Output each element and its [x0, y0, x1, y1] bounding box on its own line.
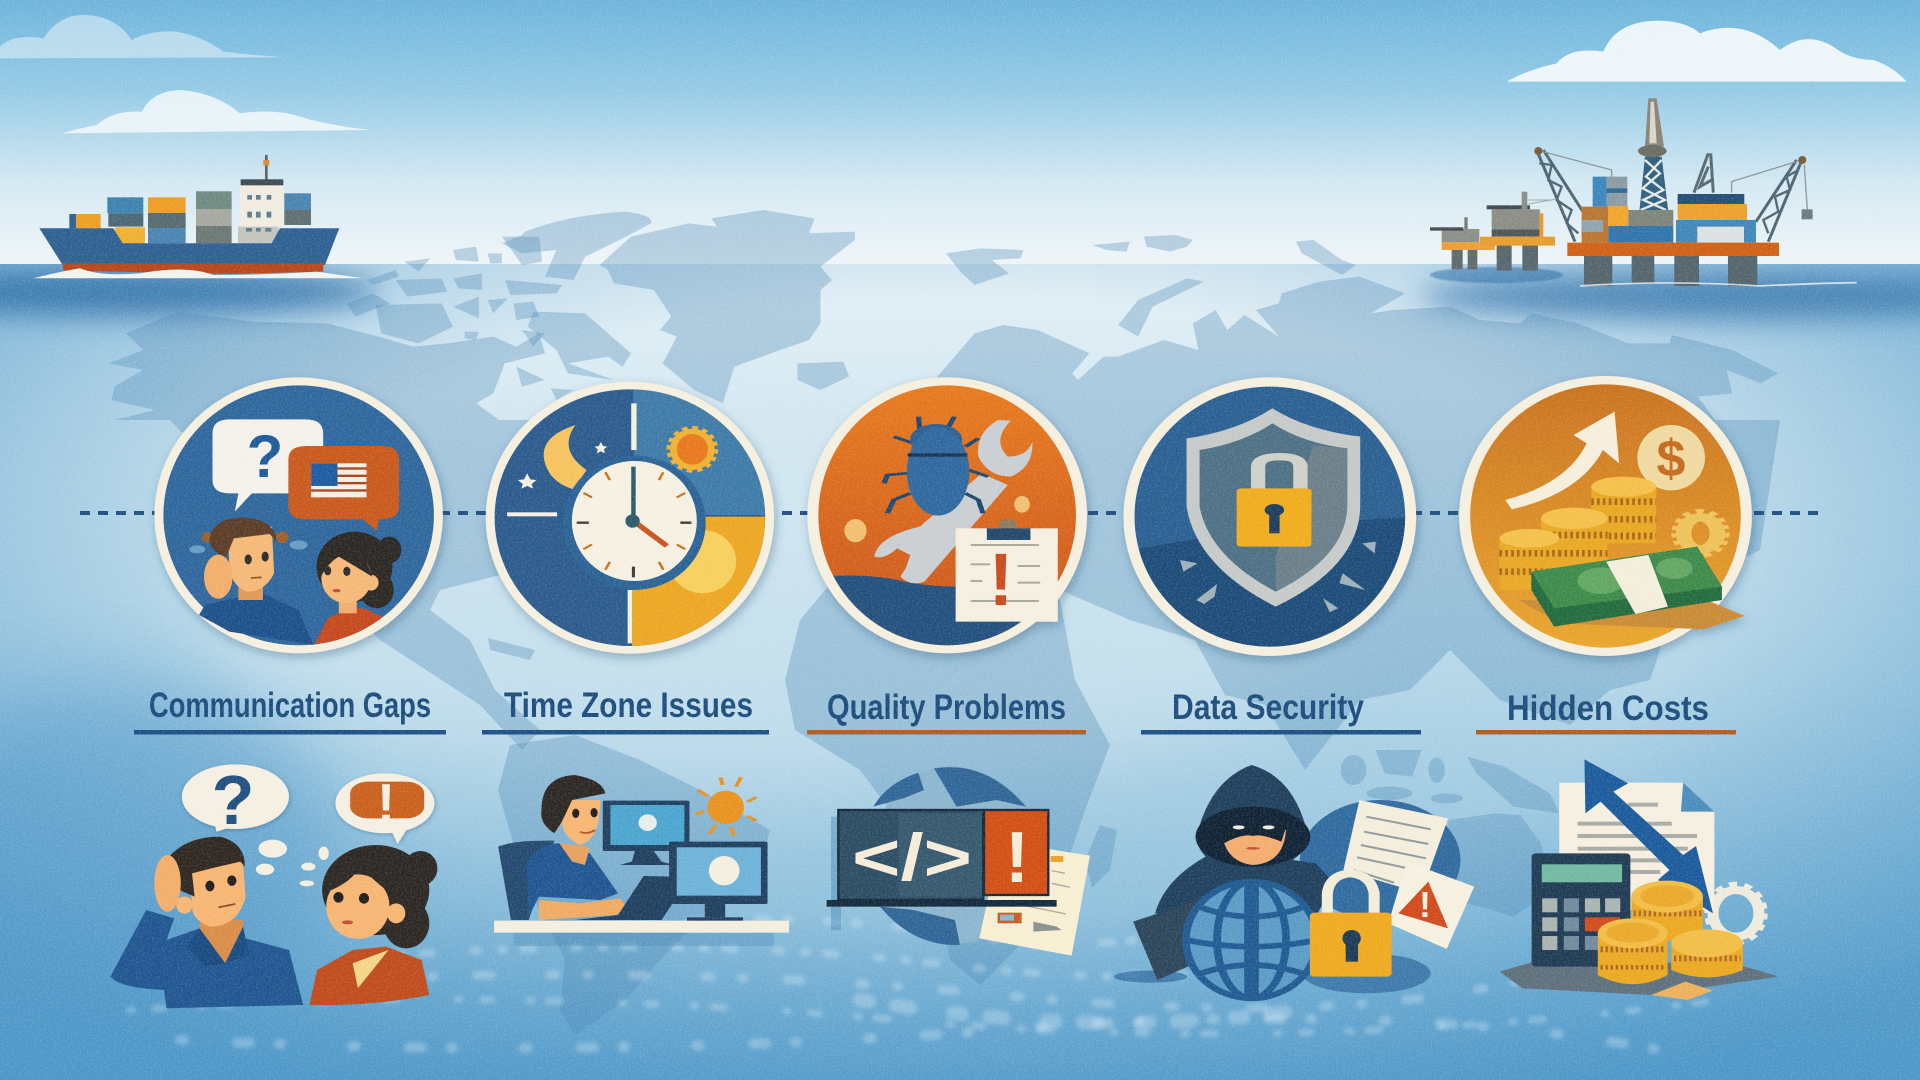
cloud: top left	[0, 15, 287, 58]
envelope under cash	[1518, 600, 1745, 629]
sun	[695, 777, 756, 836]
question speech bubble	[182, 764, 289, 832]
label: Quality Problems: Quality Problems	[827, 688, 1066, 727]
label: Time Zone Issues	[482, 686, 769, 734]
cloud: above ship	[62, 90, 370, 133]
small rig near	[1480, 192, 1555, 271]
question bubble	[212, 419, 323, 512]
illustration: remote worker at desk	[494, 775, 789, 946]
cash bundle	[1531, 547, 1722, 627]
map: Indonesia and Australia	[1341, 750, 1559, 917]
front monitor	[669, 842, 768, 922]
stars	[518, 442, 607, 489]
circle frame	[154, 377, 443, 653]
label: Data Security: Data Security	[1172, 688, 1364, 727]
main rig deck	[1567, 243, 1779, 256]
sweat drops	[189, 540, 308, 553]
main rig right crane	[1732, 156, 1813, 242]
paper	[979, 849, 1090, 956]
man with question	[199, 517, 313, 645]
rising arrow	[1505, 412, 1619, 509]
desk shadow	[513, 933, 774, 946]
desk	[494, 921, 789, 933]
illustration: calculator, coins and falling arrow	[1500, 759, 1779, 1000]
label: Data Security	[1141, 688, 1421, 734]
receipt	[1651, 982, 1713, 1000]
exclamation mark: !	[1005, 818, 1029, 898]
dollar sign: $	[1657, 430, 1686, 488]
orbs	[1014, 496, 1030, 513]
world map	[109, 210, 1780, 1035]
back globe disc	[1300, 800, 1460, 920]
map: Caribbean islands	[488, 638, 535, 660]
exclamation on clipboard: !	[989, 538, 1013, 621]
ground shadow	[1114, 953, 1431, 993]
dark card	[1133, 900, 1210, 980]
main rig legs	[1584, 255, 1757, 286]
label: Communication Gaps	[134, 686, 446, 734]
worker	[526, 775, 627, 920]
label: Time Zone Issues: Time Zone Issues	[504, 686, 753, 725]
question mark: ?	[247, 423, 283, 490]
padlock	[1237, 457, 1311, 547]
circle artwork	[163, 385, 434, 646]
main rig drilling derrick	[1638, 98, 1668, 212]
coin stacks	[1598, 881, 1743, 984]
circle frame	[486, 382, 774, 654]
circle artwork	[1457, 380, 1756, 653]
document	[1559, 783, 1714, 910]
background: sky	[0, 0, 1920, 264]
circle artwork	[494, 389, 766, 646]
wrench	[874, 420, 1032, 583]
map: Africa	[785, 560, 1110, 985]
exclamation mark: !	[377, 772, 395, 834]
code monitor	[827, 810, 1057, 930]
woman	[309, 845, 437, 1005]
main rig rear derrick	[1694, 153, 1713, 193]
falling arrow	[1584, 759, 1713, 913]
illustration: container ship	[33, 155, 363, 278]
ship bow wave	[33, 268, 363, 278]
ship cargo containers	[69, 191, 311, 244]
rig foam	[1580, 283, 1857, 286]
coin stacks	[1499, 477, 1656, 590]
main rig modules	[1582, 177, 1756, 243]
warning exclamation: !	[1419, 884, 1431, 925]
dashed connector line	[80, 511, 1820, 515]
moon	[544, 425, 587, 489]
circle artwork	[818, 385, 1076, 646]
map: North America south and Central America	[170, 420, 600, 750]
dial lines	[507, 403, 637, 643]
question mark: ?	[212, 761, 254, 839]
hooded hacker	[1155, 765, 1334, 917]
panel: time zone circle	[484, 380, 779, 657]
circle frame	[1459, 376, 1752, 656]
gear	[1708, 884, 1764, 943]
small rig far	[1430, 217, 1563, 283]
clipboard	[956, 519, 1058, 622]
warning card	[1388, 862, 1474, 949]
illustration: offshore oil rigs	[1430, 98, 1857, 286]
sea foam speckles	[130, 915, 1720, 1050]
illustration: confused colleagues	[110, 761, 437, 1008]
circle frame	[1123, 377, 1416, 656]
circle frame	[807, 377, 1087, 653]
alert speech bubble	[335, 773, 434, 844]
clock	[563, 455, 706, 590]
map: Madagascar	[1085, 825, 1117, 888]
cloud: top right	[1507, 21, 1907, 82]
flag	[311, 463, 367, 497]
map: Eurasia north	[934, 235, 1778, 420]
map: North America and Arctic islands	[109, 210, 855, 420]
label: Hidden Costs: Hidden Costs	[1507, 689, 1709, 728]
padlock	[1310, 873, 1392, 977]
wireframe globe	[1186, 882, 1317, 998]
illustration: hacker with globe and lock	[1114, 765, 1474, 998]
circle artwork	[1125, 380, 1417, 653]
panel: hidden costs circle	[1457, 376, 1756, 656]
panel: quality problems circle	[806, 377, 1092, 653]
chair	[498, 841, 554, 920]
illustration: code error with globe	[827, 766, 1090, 956]
ground shadow	[1500, 962, 1779, 995]
document	[1343, 800, 1448, 893]
main rig left crane	[1534, 147, 1612, 242]
thought dots	[256, 840, 329, 886]
sun	[670, 429, 715, 470]
flag bubble	[288, 446, 399, 531]
map: Asia south	[960, 420, 1780, 770]
globe	[873, 766, 1027, 945]
panel: communication gaps circle	[145, 373, 457, 657]
woman	[313, 532, 401, 647]
dollar coin	[1637, 425, 1705, 490]
ship bridge	[238, 155, 283, 243]
calculator	[1532, 853, 1630, 967]
gear	[1676, 511, 1725, 555]
map: South America	[498, 735, 770, 1035]
code symbol: </>	[852, 820, 972, 894]
shards	[1180, 542, 1376, 612]
laptop	[575, 876, 672, 920]
shield	[1187, 408, 1360, 607]
man scratching head	[110, 837, 303, 1008]
day quadrant	[632, 517, 775, 650]
label: Communication Gaps: Communication Gaps	[149, 686, 431, 725]
back monitor	[603, 801, 689, 865]
bug	[884, 417, 988, 516]
background: sea	[0, 262, 1920, 1080]
ship hull	[39, 228, 339, 265]
panel: data security circle	[1123, 377, 1417, 656]
